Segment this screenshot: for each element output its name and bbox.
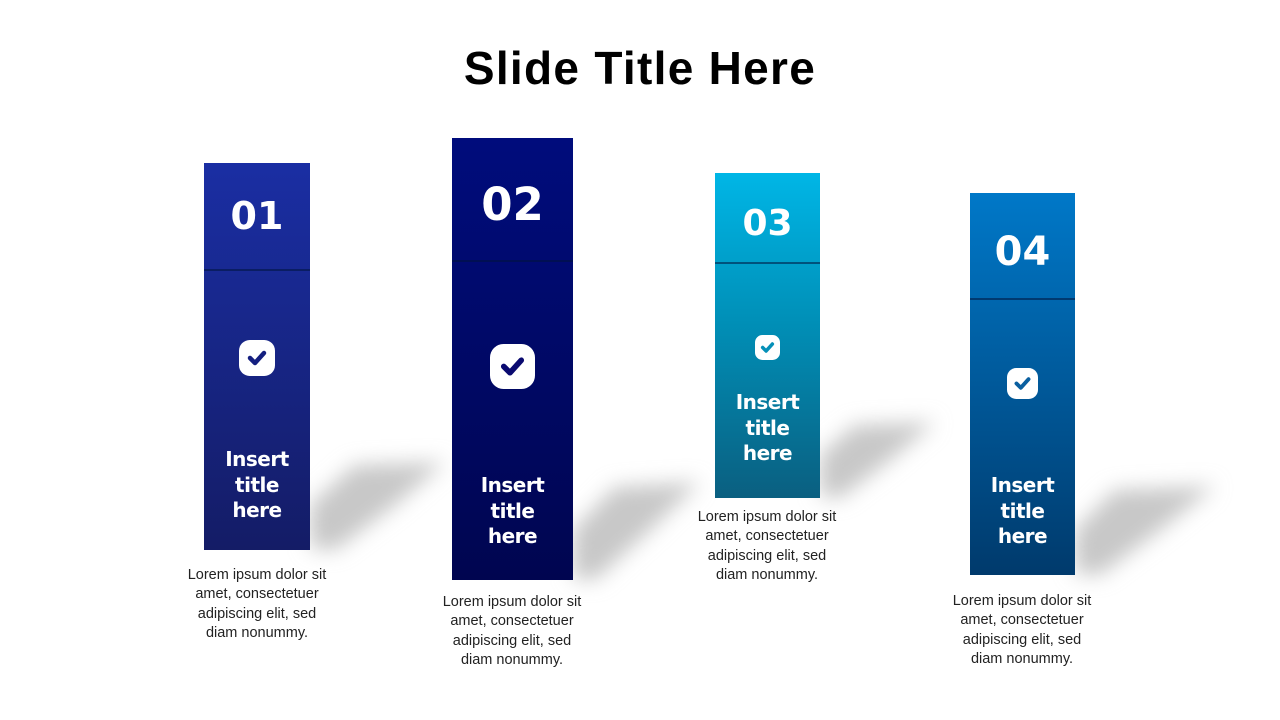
bar 02: Insert (481, 473, 544, 497)
bar 01: Insert (225, 447, 289, 471)
desc 02: diam nonummy. (461, 652, 563, 668)
desc 01 (188, 567, 326, 641)
desc 03: diam nonummy. (716, 567, 818, 583)
desc 01: adipiscing elit, sed (198, 606, 316, 622)
bar 02: 02 (481, 178, 544, 231)
bar 04: title (1001, 498, 1044, 522)
desc 01: amet, consectetuer (195, 586, 319, 602)
desc 02: Lorem ipsum dolor sit (443, 594, 581, 610)
bar 01: title (235, 472, 279, 496)
icon: check (490, 344, 535, 389)
bar 01: here (232, 498, 282, 522)
bar 03: Insert (736, 390, 799, 414)
desc 03: amet, consectetuer (705, 528, 829, 544)
desc 04: adipiscing elit, sed (963, 632, 1081, 648)
bar 03 (715, 173, 820, 498)
bar 04: Insert (991, 473, 1054, 497)
bar 04 (970, 193, 1075, 575)
desc 04: Lorem ipsum dolor sit (953, 593, 1091, 609)
bar 03: here (743, 441, 792, 465)
bar 03: 03 (742, 203, 793, 244)
bar 01: 01 (231, 194, 283, 238)
bar 02: title (491, 498, 534, 522)
icon: check (1007, 368, 1038, 399)
desc 04: diam nonummy. (971, 651, 1073, 667)
desc 01: Lorem ipsum dolor sit (188, 567, 326, 583)
desc 03: adipiscing elit, sed (708, 548, 826, 564)
desc 02: adipiscing elit, sed (453, 633, 571, 649)
bar 04: 04 (995, 229, 1050, 275)
desc 03 (698, 509, 836, 583)
bar 03: title (746, 416, 789, 440)
icon: check (239, 340, 275, 376)
title: Slide Title Here (464, 42, 816, 94)
desc 03: Lorem ipsum dolor sit (698, 509, 836, 525)
desc 04 (953, 593, 1092, 667)
icon: check (755, 335, 780, 360)
bar 04: here (998, 524, 1047, 548)
desc 01: diam nonummy. (206, 625, 308, 641)
bar 02 (452, 138, 573, 580)
desc 04: amet, consectetuer (960, 612, 1084, 628)
bar 01 (204, 163, 310, 550)
bar 02: here (488, 524, 537, 548)
desc 02 (443, 594, 582, 668)
desc 02: amet, consectetuer (450, 613, 574, 629)
